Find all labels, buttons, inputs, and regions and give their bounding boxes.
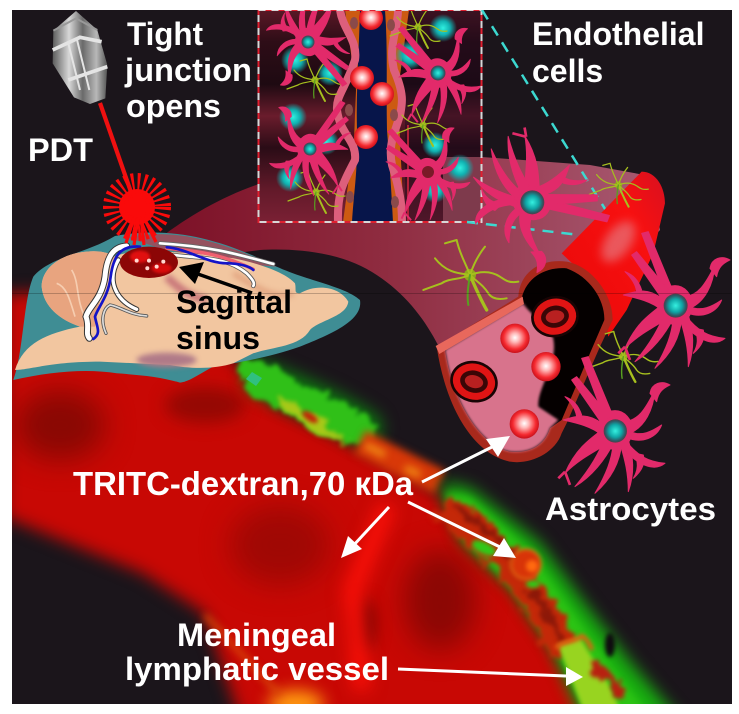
- astrocyte: top: [473, 127, 610, 273]
- vessel tube: [562, 172, 665, 337]
- orange transition segment: [360, 442, 440, 482]
- red blood cells: [445, 292, 582, 408]
- label: TRITC-dextran: TRITC-dextran,70 кDa: [73, 465, 414, 502]
- cerebellum: [42, 251, 115, 327]
- teal halo: [13, 233, 360, 383]
- blood vessel cross-section: [423, 119, 730, 493]
- panel: inset of blood-brain barrier: [260, 11, 480, 221]
- panel: fluorescence microscopy image: [4, 293, 680, 714]
- vessel cut edge: [436, 297, 524, 354]
- green band: lower segment: [440, 482, 680, 714]
- label: Meningeal lymphatic vessel: lymphatic vessel: [125, 651, 389, 687]
- brain with teal halo: [13, 233, 360, 383]
- label: Sagittal sinus: [177, 290, 290, 350]
- label: Endothelial cells: cells: [532, 53, 603, 89]
- label: Meningeal lymphatic vessel: [125, 617, 389, 687]
- label: Endothelial cells: Endothelial: [532, 16, 704, 52]
- cyan zoom guide lines: [467, 10, 610, 235]
- objective lens: [53, 11, 107, 104]
- laser burst: [115, 185, 159, 245]
- vessel lumen: [445, 268, 604, 452]
- label: Tight junction opens: junction: [124, 52, 252, 88]
- label: Astrocytes: Astrocytes: [545, 491, 716, 527]
- inset border: [258, 10, 482, 222]
- label: Meningeal lymphatic vessel: Meningeal: [177, 617, 336, 653]
- vessel shell: [437, 261, 613, 462]
- brain tissue: [15, 251, 348, 370]
- label: Endothelial cells: [533, 22, 702, 82]
- label: PDT: PDT: [28, 132, 93, 168]
- laser spot on brain: [120, 247, 178, 278]
- label: Sagittal sinus: Sagittal: [176, 284, 292, 320]
- tracer spheres: [500, 324, 561, 439]
- laser beam: [100, 103, 132, 195]
- astrocyte: bottom: [558, 357, 670, 493]
- arrow: sagittal sinus pointer: [179, 262, 252, 293]
- green glial cells: [423, 163, 658, 382]
- label: Tight junction opens: [124, 16, 252, 124]
- label: Tight junction opens: opens: [126, 88, 221, 124]
- label: Tight junction opens: Tight: [127, 16, 203, 52]
- blood vessels: [86, 243, 273, 339]
- vessel wall interior: [445, 303, 558, 452]
- panel: pink projection cone: [160, 150, 660, 345]
- astrocyte: right: [618, 232, 730, 368]
- label: Sagittal sinus: sinus: [176, 320, 260, 356]
- arrows: TRITC-dextran and lymphatic pointers: [341, 436, 583, 686]
- green band: upper segment: [262, 378, 365, 428]
